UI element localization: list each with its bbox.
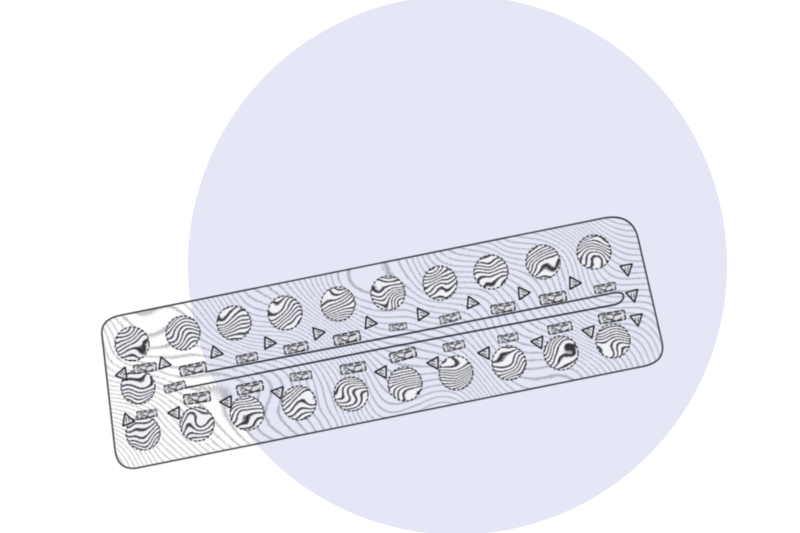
centre slot: [185, 293, 624, 388]
lower rectangle marks: [137, 310, 626, 419]
lower arrow triangles: [119, 314, 644, 426]
upper arrow triangles: [116, 264, 640, 380]
background circle: [188, 0, 727, 533]
illustration: pill pack over circle: [100, 0, 727, 533]
pill outlines: [115, 235, 630, 450]
pill swirl patterns: [115, 235, 630, 450]
pack contour lines: [102, 218, 662, 468]
pill faces: [115, 235, 630, 450]
blister pack: [100, 216, 664, 470]
pack outline: [102, 217, 663, 468]
upper rectangle marks: [134, 282, 616, 376]
